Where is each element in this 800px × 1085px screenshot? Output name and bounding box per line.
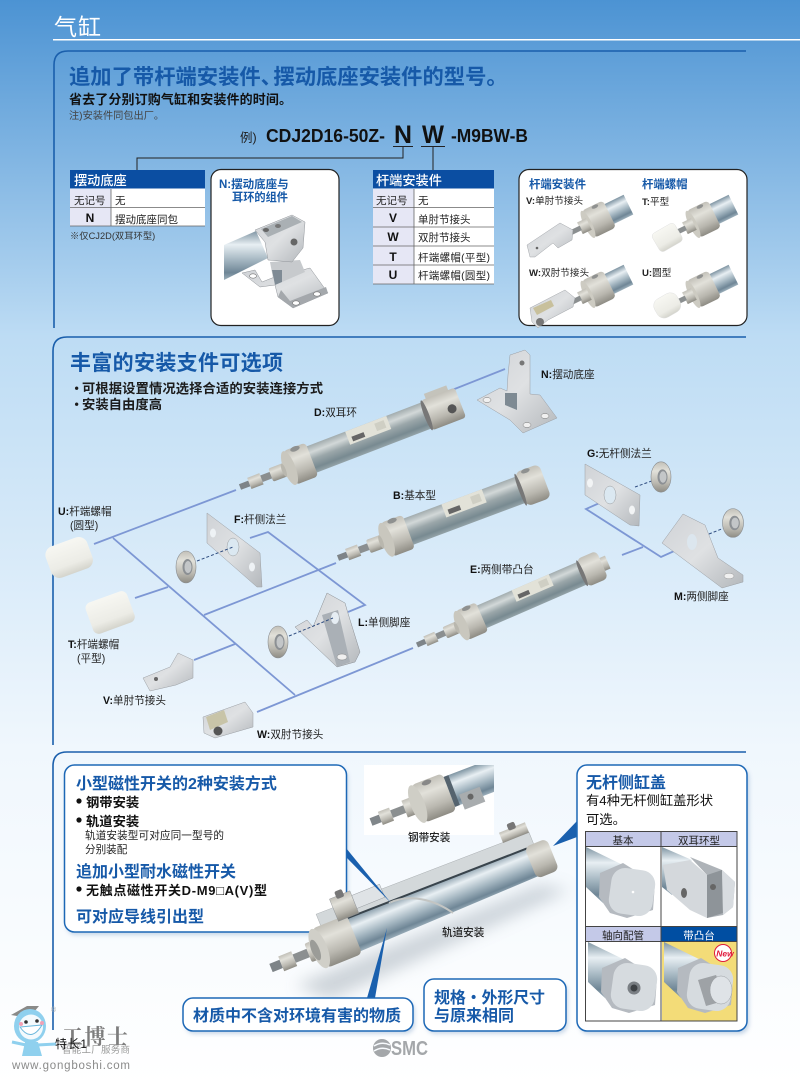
- label U: (圆型): [70, 519, 98, 532]
- panel: mounting bracket options: [43, 337, 746, 745]
- callout: no harmful materials: 材质中不含对环境有害的物质: [193, 1006, 401, 1025]
- callout: rod end fitting photos: T:平型: [642, 196, 670, 208]
- label U: U:杆端螺帽: [58, 505, 112, 518]
- watermark: 工博士 mascot: 智能工厂服务商: [62, 1044, 130, 1056]
- part V clevis: [143, 653, 193, 691]
- part M foot: [662, 509, 744, 588]
- cylinder D: [233, 385, 466, 504]
- table: rod end fittings: 双肘节接头: [418, 231, 470, 244]
- text: saves time: 省去了分别订购气缸和安装件的时间。: [69, 92, 292, 107]
- watermark: 工博士 mascot: [11, 1006, 130, 1072]
- badge: New: [714, 944, 735, 962]
- callout: N bracket: 耳环的组件: [232, 190, 288, 204]
- cover: basic: [586, 847, 657, 918]
- label: band mounting: 钢带安装: [408, 831, 451, 844]
- label F: F:杆侧法兰: [234, 513, 286, 526]
- callout: switch mounting: [64, 765, 348, 935]
- icon: V clevis: [527, 191, 635, 257]
- grid of covers: 带凸台: [683, 929, 715, 942]
- part G flange: [585, 462, 671, 526]
- grid of covers: 基本: [612, 834, 634, 847]
- icon: T flat cap: [651, 191, 740, 253]
- heading: added models: 追加了带杆端安装件、: [69, 65, 282, 89]
- bullet list: ・: [70, 381, 83, 396]
- model number example: W: [422, 121, 444, 149]
- watermark: 工博士 mascot: ®: [51, 1006, 57, 1014]
- callout: N bracket: [211, 170, 339, 326]
- connector lines: [94, 369, 692, 712]
- label G: G:无杆侧法兰: [587, 447, 652, 460]
- callout: rear covers: 有4种无杆侧缸盖形状: [586, 792, 713, 808]
- callout: switch mounting: 小型磁性开关的2种安装方式: [76, 774, 277, 793]
- part L foot: [268, 593, 360, 667]
- grid of covers: 双耳环型: [678, 834, 720, 847]
- callout: N bracket: N:摆动底座与: [219, 177, 289, 191]
- callout: rear covers: [577, 765, 749, 1034]
- model number example: [137, 121, 528, 170]
- callout: rod end fitting photos: [519, 170, 747, 328]
- callout: switch mounting: 无触点磁性开关D-M9□A(V)型: [86, 883, 267, 898]
- callout: rod end fitting photos: 杆端安装件: [529, 177, 586, 191]
- grid of covers: [586, 831, 737, 1021]
- part U round cap: [43, 534, 95, 580]
- label E: E:两侧带凸台: [470, 563, 534, 576]
- header: 气缸: 气缸: [54, 14, 101, 40]
- bullet list: ・: [70, 397, 83, 412]
- callout: rod end fitting photos: V:单肘节接头: [526, 195, 583, 207]
- bullet list: [70, 380, 323, 412]
- table: rod end fittings: 无: [418, 195, 429, 207]
- model number example: CDJ2D16-50Z-: [266, 126, 385, 146]
- page number: 特长1: [55, 1036, 87, 1051]
- label: rail mounting: 轨道安装: [442, 926, 485, 939]
- table: swing base: 无: [115, 195, 126, 207]
- table: swing base: 摆动底座同包: [115, 213, 178, 226]
- pointer: to body: [367, 928, 387, 998]
- table: rod end fittings: 单肘节接头: [418, 213, 470, 226]
- label T: T:杆端螺帽: [68, 638, 119, 651]
- callout: switch mounting: 可对应导线引出型: [76, 907, 204, 926]
- callout: rod end fitting photos: W:双肘节接头: [529, 267, 589, 279]
- bullet list: 安装自由度高: [82, 396, 162, 412]
- badge: New: New: [716, 948, 735, 958]
- label M: M:两侧脚座: [674, 590, 729, 603]
- table: swing base: 无记号: [74, 195, 106, 207]
- table: rod end fittings: 杆端螺帽(圆型): [418, 269, 490, 282]
- label T: (平型): [77, 652, 105, 665]
- logo: SMC: SMC: [391, 1038, 428, 1060]
- pointer: to switch: [346, 848, 391, 903]
- table: rod end fittings: [373, 170, 494, 284]
- callout: rear covers: 可选。: [586, 812, 626, 827]
- table: rod end fittings: 杆端螺帽(平型): [418, 251, 490, 264]
- callout: switch mounting: 钢带安装: [86, 794, 139, 810]
- footnote: ※仅CJ2D(双耳环型): [70, 230, 155, 241]
- label V: V:单肘节接头: [103, 694, 166, 707]
- callout: switch mounting: 轨道安装型可对应同一型号的: [85, 829, 224, 842]
- callout: no harmful materials: [183, 998, 415, 1034]
- callout: rod end fitting photos: 杆端螺帽: [642, 177, 688, 191]
- note: 注)安装件同包出厂。: [69, 109, 164, 122]
- model number example: 例): [240, 131, 257, 145]
- callout: switch mounting: 追加小型耐水磁性开关: [76, 862, 236, 881]
- model number example: -M9BW-B: [451, 126, 528, 146]
- table: rod end fittings: U: [389, 268, 397, 282]
- label N: N:摆动底座: [541, 368, 595, 381]
- part W double clevis: [203, 702, 253, 738]
- callout: rear covers: 无杆侧缸盖: [586, 773, 666, 792]
- label B: B:基本型: [393, 489, 436, 502]
- heading: 丰富的安装支件可选项: [70, 351, 283, 375]
- heading: added models: 摆动底座安装件的型号。: [273, 64, 508, 89]
- cover: double clevis: [662, 847, 735, 918]
- part N bracket: [477, 350, 557, 433]
- table: swing base: 摆动底座: [74, 172, 127, 188]
- callout: same dimensions: 规格・外形尺寸: [434, 988, 545, 1007]
- label T: [68, 638, 119, 665]
- callout: rod end fitting photos: U:圆型: [642, 267, 672, 279]
- panel: model numbers with mounting brackets: [54, 51, 747, 328]
- table: swing base: N: [86, 211, 94, 225]
- callout: switch mounting: 轨道安装: [86, 813, 139, 829]
- bullet list: 可根据设置情况选择合适的安装连接方式: [82, 380, 323, 396]
- part T flat cap: [84, 589, 136, 635]
- icon: bracket with tube: [224, 215, 328, 308]
- table: rod end fittings: V: [389, 211, 397, 225]
- watermark: 工博士 mascot: 工博士: [62, 1025, 128, 1049]
- callout: switch mounting: 分别装配: [85, 843, 128, 856]
- heading: added models: [69, 64, 508, 89]
- table: rod end fittings: T: [389, 250, 397, 264]
- callout: same dimensions: [424, 979, 568, 1034]
- label U: [58, 505, 112, 532]
- callout: same dimensions: 与原来相同: [434, 1007, 514, 1025]
- part F flange: [176, 513, 262, 587]
- table: swing base: [70, 170, 205, 226]
- cylinder E: [411, 548, 614, 660]
- label L: L:单侧脚座: [358, 616, 411, 629]
- big cylinder with rail: [253, 811, 570, 1000]
- photo: band mounting: [364, 765, 494, 835]
- logo: SMC: [373, 1038, 428, 1060]
- table: rod end fittings: 无记号: [376, 195, 408, 207]
- label D: D:双耳环: [314, 407, 357, 419]
- label W: W:双肘节接头: [257, 728, 324, 741]
- table: rod end fittings: W: [387, 230, 399, 244]
- cover: boss: [664, 942, 735, 1013]
- panel: switch mounting and features: [53, 745, 749, 1034]
- watermark: 工博士 mascot: www.gongboshi.com: [11, 1060, 130, 1072]
- model number example: N: [394, 121, 412, 149]
- grid of covers: 轴向配管: [602, 929, 644, 942]
- icon: U round cap: [651, 261, 740, 321]
- pointer: to rear cover: [553, 821, 577, 846]
- icon: W double clevis: [530, 261, 635, 328]
- cover: axial port: [588, 942, 659, 1013]
- table: rod end fittings: 杆端安装件: [376, 173, 442, 188]
- cylinder B: [332, 464, 551, 575]
